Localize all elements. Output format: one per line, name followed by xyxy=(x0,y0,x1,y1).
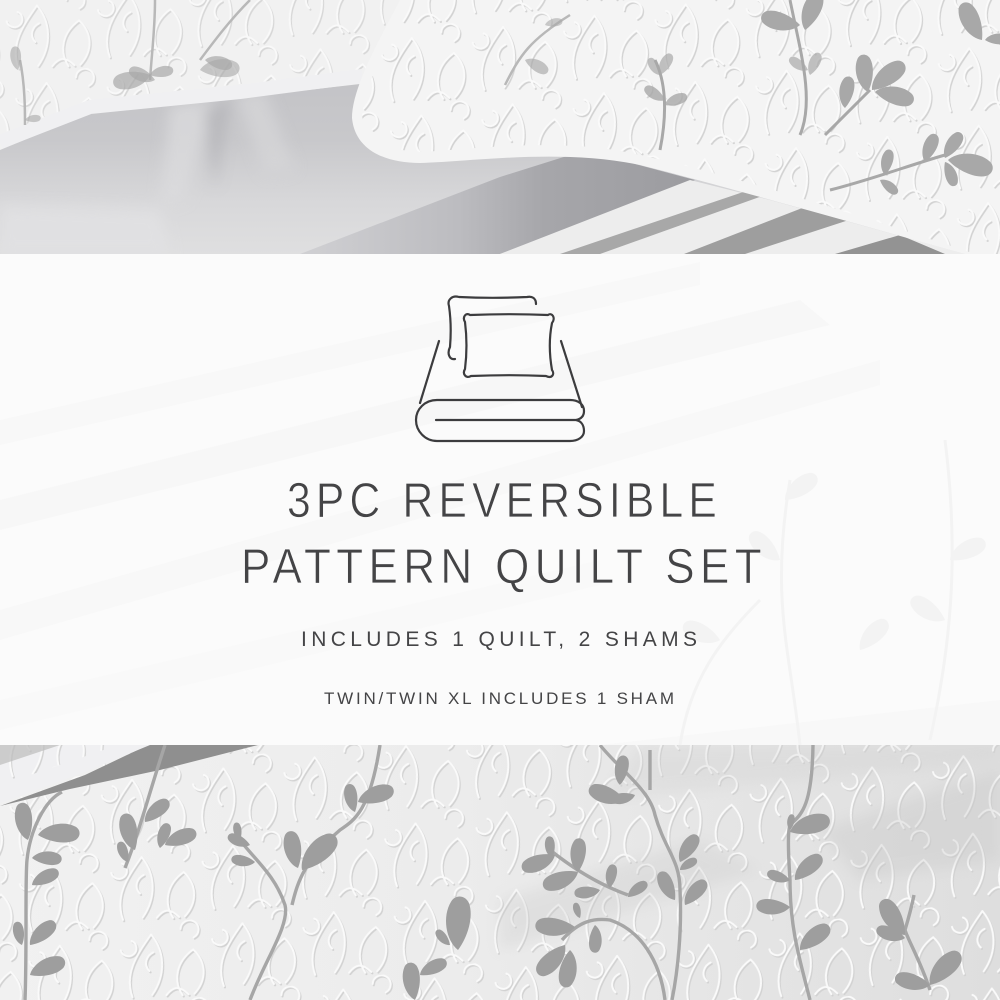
striped quilt xyxy=(500,180,965,254)
left pillow with piping xyxy=(0,0,420,150)
heading: 3PC reversible pattern quilt set: PATTERN QUILT SET xyxy=(241,540,767,594)
front pillow xyxy=(464,314,554,377)
back pillow xyxy=(449,297,536,359)
dark sheet under right pillow xyxy=(300,155,695,254)
dark fold xyxy=(0,745,258,806)
photo: top bedding area xyxy=(0,0,1000,254)
vines: top of image xyxy=(9,0,1000,197)
sheet folds xyxy=(0,90,295,254)
panel: white translucent text band xyxy=(0,254,1000,745)
subheading: set contents: INCLUDES 1 QUILT, 2 SHAMS xyxy=(301,628,697,651)
quilt folds xyxy=(416,341,584,441)
icon: folded quilt with two pillows xyxy=(416,297,584,441)
vines: bottom of image xyxy=(11,745,966,1000)
heading: 3PC reversible pattern quilt set: 3PC REVERSIBLE xyxy=(287,474,722,528)
lower-left pillow with piping xyxy=(0,745,150,803)
note: twin size: TWIN/TWIN XL INCLUDES 1 SHAM xyxy=(324,689,674,708)
right pillow xyxy=(352,0,1000,254)
heading: 3PC reversible pattern quilt set xyxy=(241,474,767,594)
photo: bottom quilt area xyxy=(0,745,1000,1000)
